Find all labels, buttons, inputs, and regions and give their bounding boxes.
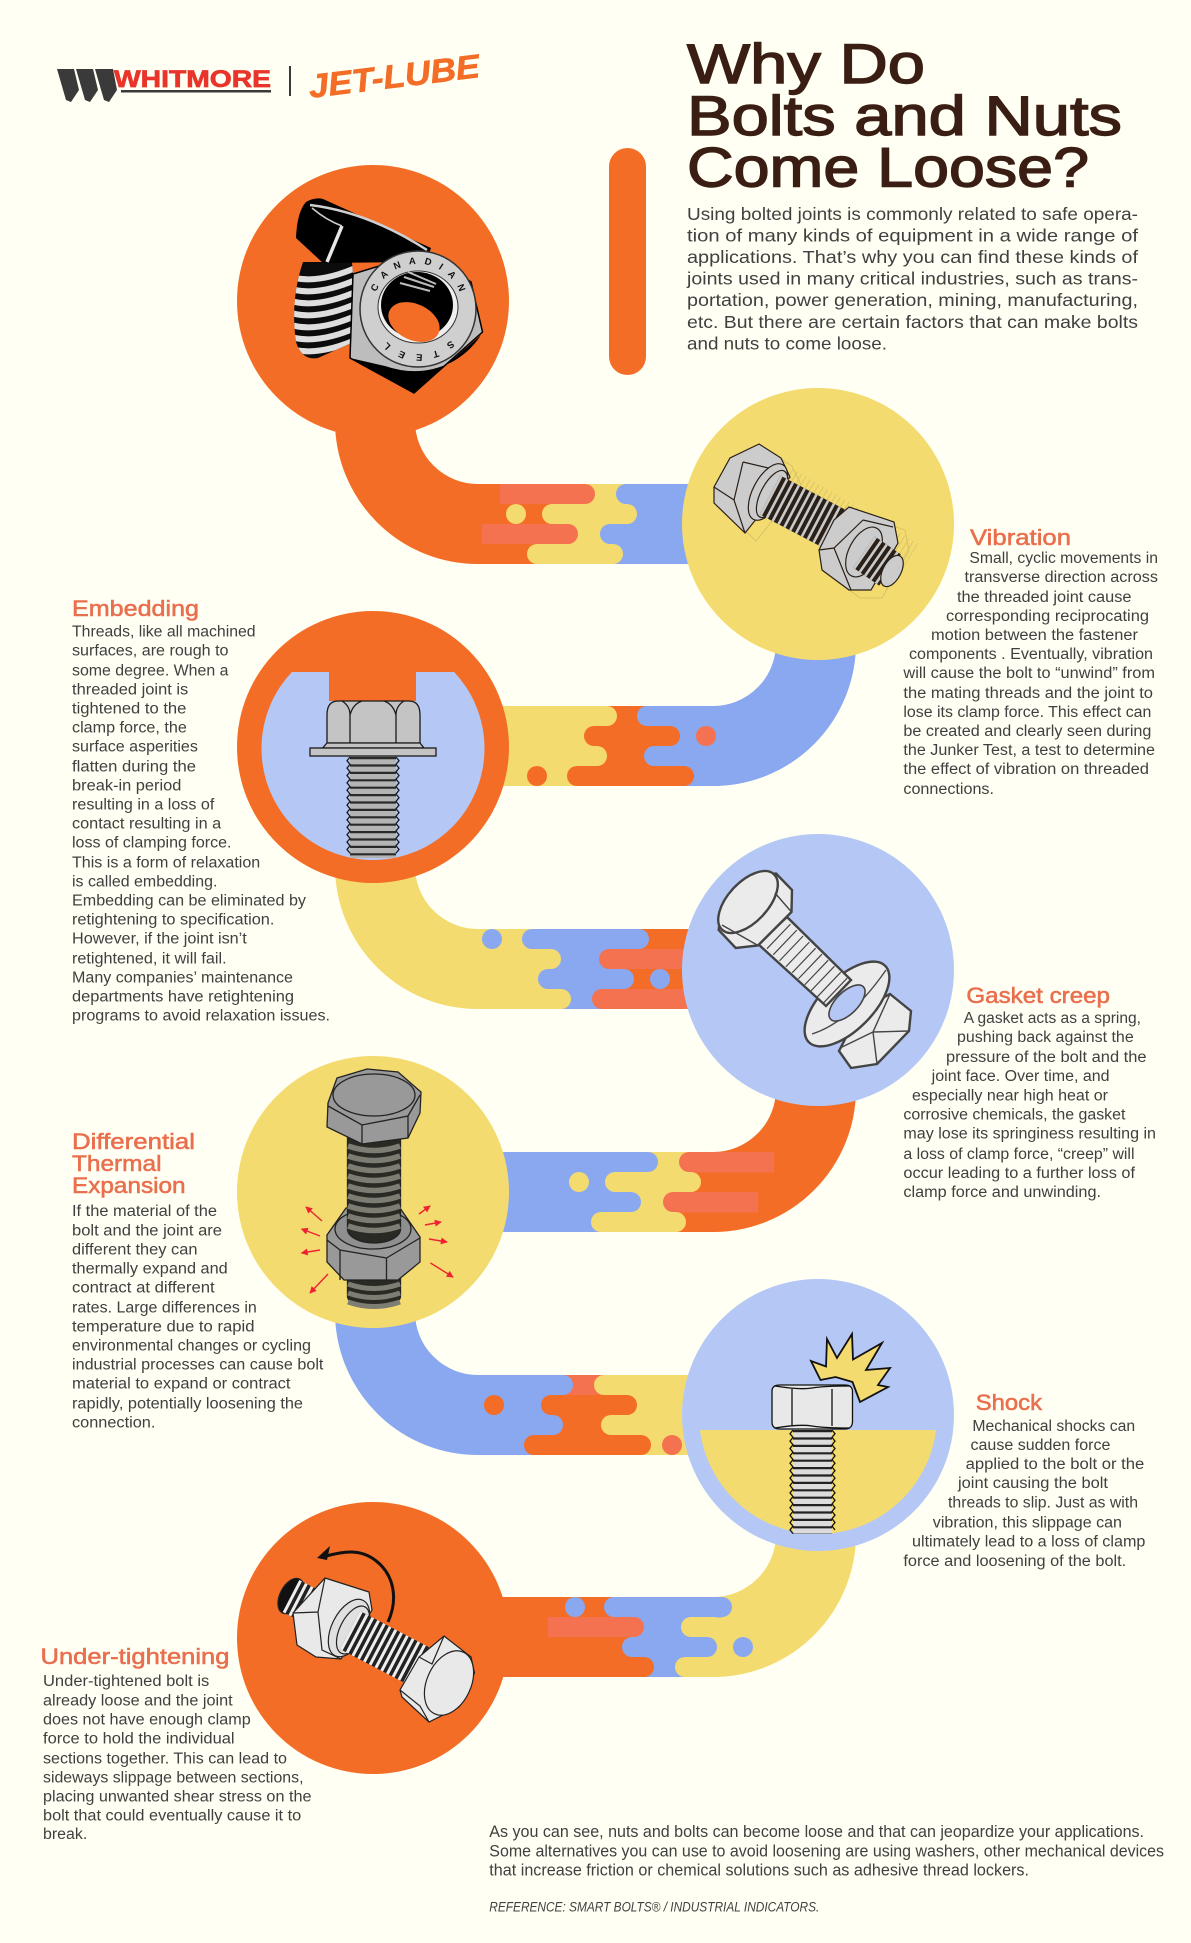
body: gasket creep: corrosive chemicals, the gasket: [903, 1107, 1126, 1124]
intro text: portation, power generation, mining, manufacturing,: [687, 290, 1138, 310]
body: differential thermal expansion: temperature due to rapid: [72, 1318, 254, 1335]
icon: silver nut: CANADIAN: [371, 258, 466, 292]
body: embedding: retightened, it will fail.: [72, 950, 227, 968]
body: gasket creep: clamp force and unwinding.: [903, 1184, 1101, 1201]
body: embedding: Many companies’ maintenance: [72, 970, 293, 986]
icon: flange bolt: [310, 701, 436, 858]
heading: differential thermal expansion: Expansion: [72, 1173, 186, 1198]
text: shock: [903, 1390, 1145, 1570]
body: embedding: surfaces, are rough to: [72, 642, 228, 660]
body: shock: ultimately lead to a loss of clamp: [912, 1534, 1145, 1551]
title: Come Loose?: [687, 136, 1089, 198]
inner joint: [700, 1430, 936, 1534]
body: under-tightening: placing unwanted shear stress on the: [43, 1788, 312, 1805]
body: vibration: components . Eventually, vibration: [909, 646, 1153, 663]
icon: impact burst: [811, 1334, 890, 1402]
logo: Whitmore and Jet-Lube: JET-LUBE: [306, 47, 483, 105]
body: vibration: Small, cyclic movements in: [969, 550, 1158, 567]
body: embedding: resulting in a loss of: [72, 796, 215, 814]
body: differential thermal expansion: connection.: [72, 1414, 155, 1431]
body: shock: threads to slip. Just as with: [948, 1494, 1138, 1512]
intro text: and nuts to come loose.: [687, 334, 887, 354]
icon: gray bolt and nut: [327, 1069, 421, 1308]
body: gasket creep: especially near high heat or: [912, 1088, 1108, 1104]
body: vibration: [902, 550, 1158, 798]
body: gasket creep: may lose its springiness resulting in: [903, 1126, 1156, 1143]
body: embedding: tightened to the: [72, 700, 186, 718]
body: differential thermal expansion: rapidly, potentially loosening the: [72, 1395, 303, 1412]
text: differential thermal expansion: [72, 1129, 324, 1431]
body: vibration: the effect of vibration on threaded: [903, 761, 1149, 778]
body: under-tightening: force to hold the individual: [43, 1730, 235, 1747]
body: vibration: will cause the bolt to “unwind” from: [902, 665, 1155, 682]
body: embedding: This is a form of relaxation: [72, 854, 260, 872]
pipe 2: blue to yellow: [400, 620, 816, 786]
body: embedding: Threads, like all machined: [72, 624, 256, 640]
body: shock: Mechanical shocks can: [972, 1418, 1135, 1435]
icon: silver nut: [349, 250, 484, 394]
icon: loose bolt and nut: [273, 1574, 483, 1723]
pipe 3: yellow to orange: [375, 840, 700, 1009]
body: under-tightening: sections together. This can lead to: [43, 1750, 287, 1767]
body: vibration: corresponding reciprocating: [946, 608, 1149, 625]
body: embedding: flatten during the: [72, 758, 196, 776]
title: [687, 32, 1122, 198]
body: embedding: some degree. When a: [72, 662, 229, 680]
heading: embedding: Embedding: [72, 596, 199, 621]
text: vibration: [902, 525, 1158, 798]
panel: under-tightening circle: [237, 1502, 509, 1774]
body: vibration: motion between the fastener: [931, 627, 1138, 644]
intro text: etc. But there are certain factors that can make bolts: [687, 312, 1138, 332]
icon: silver nut: STEEL: [385, 341, 454, 361]
body: under-tightening: already loose and the joint: [43, 1692, 233, 1709]
closing text: Some alternatives you can use to avoid loosening are using washers, other mechanical devices: [489, 1842, 1164, 1860]
body: vibration: the threaded joint cause: [957, 589, 1132, 606]
body: vibration: transverse direction across: [964, 569, 1158, 586]
heading: differential thermal expansion: Differential: [72, 1129, 195, 1154]
heading: gasket creep: Gasket creep: [966, 983, 1110, 1008]
panel: intro bolt circle: [237, 165, 509, 432]
panel: shock circle: [682, 1279, 954, 1551]
body: embedding: Embedding can be eliminated by: [72, 892, 306, 910]
pipe 6: yellow to orange: [440, 1515, 816, 1677]
body: embedding: retightening to specification.: [72, 912, 274, 928]
title: Why Do: [687, 32, 925, 95]
heading: vibration: Vibration: [970, 525, 1071, 550]
body: embedding: surface asperities: [72, 738, 198, 756]
body: gasket creep: pressure of the bolt and the: [946, 1049, 1147, 1066]
icon: bolt with washer and nut: [707, 861, 911, 1068]
body: embedding: break-in period: [72, 778, 181, 794]
icon: hex bolt head: [296, 198, 431, 263]
body: vibration: connections.: [903, 781, 994, 798]
panel: gasket creep circle: [682, 834, 954, 1106]
closing text: that increase friction or chemical solutions such as adhesive thread lockers.: [489, 1862, 1029, 1880]
intro text: joints used in many critical industries, such as trans-: [686, 268, 1138, 288]
body: shock: joint causing the bolt: [957, 1475, 1109, 1492]
orange vertical accent bar: [609, 148, 646, 375]
closing text: [489, 1823, 1164, 1880]
body: shock: vibration, this slippage can: [933, 1515, 1122, 1532]
body: gasket creep: A gasket acts as a spring,: [964, 1010, 1141, 1027]
body: under-tightening: bolt that could eventually cause it to: [43, 1807, 301, 1824]
text: gasket creep: [903, 983, 1156, 1201]
heading: differential thermal expansion: [72, 1129, 195, 1198]
body: differential thermal expansion: environmental changes or cycling: [72, 1337, 311, 1354]
icon: rotation arrow: [317, 1546, 394, 1622]
body: gasket creep: a loss of clamp force, “creep” will: [903, 1146, 1134, 1163]
body: embedding: However, if the joint isn’t: [72, 930, 248, 948]
body: gasket creep: pushing back against the: [957, 1029, 1134, 1046]
intro text: Using bolted joints is commonly related to safe opera-: [687, 204, 1138, 224]
panel: vibration circle: [682, 388, 954, 660]
intro text: applications. That’s why you can find these kinds of: [687, 247, 1138, 267]
body: embedding: loss of clamping force.: [72, 834, 231, 852]
body: vibration: the mating threads and the joint to: [903, 685, 1153, 702]
icon: bolt in joint: [772, 1385, 852, 1534]
body: shock: [903, 1418, 1145, 1570]
icon: threaded shank: [294, 262, 353, 358]
pipe 5: blue to yellow: [375, 1290, 700, 1455]
body: embedding: programs to avoid relaxation issues.: [72, 1008, 330, 1024]
body: under-tightening: Under-tightened bolt is: [43, 1673, 210, 1690]
text: under-tightening: [40, 1644, 312, 1843]
body: differential thermal expansion: material to expand or contract: [72, 1375, 291, 1392]
body: differential thermal expansion: thermally expand and: [72, 1260, 228, 1277]
body: under-tightening: sideways slippage between sections,: [43, 1769, 304, 1786]
body: differential thermal expansion: rates. Large differences in: [72, 1299, 257, 1316]
body: differential thermal expansion: different they can: [72, 1241, 198, 1258]
heading: under-tightening: Under-tightening: [40, 1644, 230, 1669]
body: embedding: [72, 624, 330, 1024]
body: shock: force and loosening of the bolt.: [903, 1553, 1126, 1570]
closing text: As you can see, nuts and bolts can become loose and that can jeopardize your applications.: [489, 1823, 1144, 1841]
inner joint cutaway: [262, 672, 484, 860]
body: under-tightening: [43, 1673, 312, 1843]
panel: thermal expansion circle: [237, 1056, 509, 1328]
heading: differential thermal expansion: Thermal: [72, 1151, 162, 1176]
logo: Whitmore and Jet-Lube: WHITMORE: [114, 66, 271, 93]
body: gasket creep: occur leading to a further loss of: [903, 1165, 1136, 1182]
body: embedding: departments have retightening: [72, 988, 294, 1006]
icon: ghost vibration outline: [725, 452, 909, 598]
heading: shock: Shock: [976, 1390, 1043, 1415]
icon: vibrating bolt: [714, 444, 908, 590]
body: vibration: lose its clamp force. This effect can: [903, 704, 1151, 721]
body: differential thermal expansion: industrial processes can cause bolt: [72, 1356, 324, 1373]
body: embedding: contact resulting in a: [72, 816, 222, 832]
panel: embedding circle: [237, 611, 509, 883]
body: vibration: the Junker Test, a test to determine: [903, 742, 1155, 759]
body: differential thermal expansion: [72, 1203, 324, 1431]
body: under-tightening: break.: [43, 1826, 87, 1843]
pipe 1: orange to blue: [375, 400, 700, 564]
body: vibration: be created and clearly seen during: [903, 723, 1151, 740]
logo: Whitmore and Jet-Lube: [57, 47, 483, 105]
body: differential thermal expansion: bolt and the joint are: [72, 1222, 222, 1239]
body: shock: cause sudden force: [970, 1437, 1110, 1454]
text: embedding: [72, 596, 330, 1024]
reference note: REFERENCE: SMART BOLTS® / INDUSTRIAL INDICATORS.: [489, 1900, 819, 1915]
intro text: [686, 204, 1138, 354]
icon: red expansion arrows: [302, 1206, 453, 1293]
body: gasket creep: [903, 1010, 1156, 1201]
body: embedding: is called embedding.: [72, 874, 217, 890]
pipe 4: orange to blue: [440, 1070, 816, 1232]
intro text: tion of many kinds of equipment in a wide range of: [687, 226, 1138, 246]
body: shock: applied to the bolt or the: [966, 1456, 1144, 1473]
title: Bolts and Nuts: [687, 84, 1122, 147]
body: gasket creep: joint face. Over time, and: [931, 1068, 1110, 1085]
body: under-tightening: does not have enough clamp: [43, 1711, 251, 1728]
body: embedding: threaded joint is: [72, 682, 189, 698]
body: embedding: clamp force, the: [72, 720, 187, 736]
body: differential thermal expansion: contract at different: [72, 1279, 215, 1296]
body: differential thermal expansion: If the material of the: [72, 1203, 217, 1220]
